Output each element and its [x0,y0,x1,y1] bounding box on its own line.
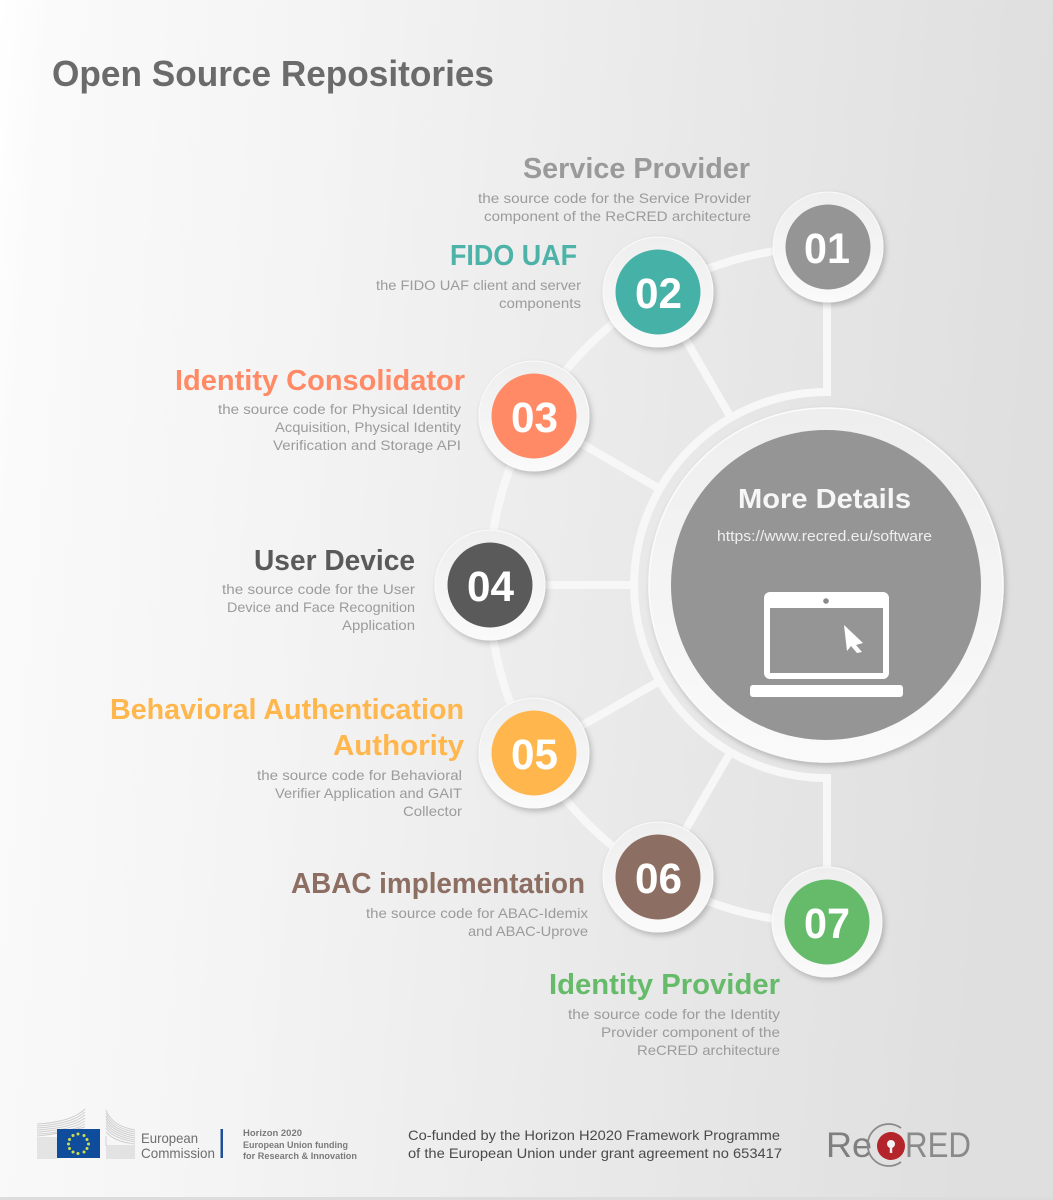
description 05: the source code for Behavioral [257,767,462,783]
funding statement [408,1127,782,1161]
bubble 03 [479,361,589,471]
bubble 07: 07 [804,900,850,948]
icon: commission building [37,1109,135,1158]
horizon text [243,1128,357,1162]
divider bar [220,1129,223,1158]
description 07: ReCRED architecture [637,1042,780,1058]
bubble 06 [603,822,713,932]
bubble 04 [435,530,545,640]
bubble 02: 02 [635,270,682,318]
description 03: the source code for Physical Identity [218,401,461,417]
connector network [489,247,827,923]
description 03: Verification and Storage API [273,437,461,453]
commission wordmark: Commission [141,1145,215,1161]
step 06 [291,822,713,939]
step 07 [549,867,882,1058]
heading 05 [110,694,464,762]
description 03: Acquisition, Physical Identity [275,419,461,435]
heading: more details: More Details [738,483,911,514]
description 01: component of the ReCRED architecture [484,208,751,224]
horizon text: European Union funding [243,1140,348,1151]
step 05 [110,694,589,819]
heading 07: Identity Provider [549,969,780,1001]
bubble 01 [773,192,883,302]
panel: more details [649,408,1003,762]
logo: recred: RED [905,1126,971,1165]
description 05: Collector [403,803,462,819]
description 03 [218,401,461,453]
horizon text: Horizon 2020 [243,1128,302,1139]
description 02 [376,277,581,311]
bubble 06: 06 [635,855,682,903]
heading 05: Behavioral Authentication [110,694,464,726]
link: https://www.recred.eu/software [717,529,932,545]
heading 02: FIDO UAF [450,240,577,272]
commission wordmark [141,1130,215,1161]
description 04: Device and Face Recognition [227,599,415,615]
heading 03: Identity Consolidator [175,365,465,397]
logo: european commission [37,1109,357,1162]
bubble 01: 01 [804,225,850,273]
bubble 04: 04 [467,563,514,611]
central disc fill [671,430,981,740]
description 06 [366,905,588,939]
description 07: Provider component of the [601,1024,780,1040]
description 04 [222,581,415,633]
step 03 [175,361,589,471]
logo: recred [826,1124,971,1166]
funding statement: Co-funded by the Horizon H2020 Framework Programme [408,1127,780,1143]
bubble 05: 05 [511,731,558,779]
description 05: Verifier Application and GAIT [275,785,462,801]
description 06: the source code for ABAC-Idemix [366,905,588,921]
description 04: Application [342,617,415,633]
heading 06: ABAC implementation [291,868,585,900]
description 01: the source code for the Service Provider [478,190,751,206]
bubble 07 [772,867,882,977]
heading 01: Service Provider [523,153,750,185]
description 02: components [499,295,581,311]
description 05 [257,767,462,819]
icon: laptop with cursor [750,592,903,697]
icon: eu flag [57,1129,100,1158]
heading 04: User Device [254,545,415,577]
description 01 [478,190,751,224]
description 06: and ABAC-Uprove [468,923,588,939]
logo: recred: Re [826,1126,872,1165]
description 04: the source code for the User [222,581,415,597]
commission wordmark: European [141,1130,198,1146]
description 07 [568,1006,780,1058]
bubble 02 [603,237,713,347]
heading 05: Authority [333,730,464,762]
bubble 03: 03 [511,394,558,442]
step 04 [222,530,545,640]
horizon text: for Research & Innovation [243,1151,357,1162]
step 02 [376,237,713,347]
central disc [649,408,1003,762]
step 01 [478,153,883,302]
description 07: the source code for the Identity [568,1006,780,1022]
bubble 05 [479,698,589,808]
description 02: the FIDO UAF client and server [376,277,581,293]
title: Open Source Repositories [52,53,494,94]
funding statement: of the European Union under grant agreement no 653417 [408,1145,782,1161]
